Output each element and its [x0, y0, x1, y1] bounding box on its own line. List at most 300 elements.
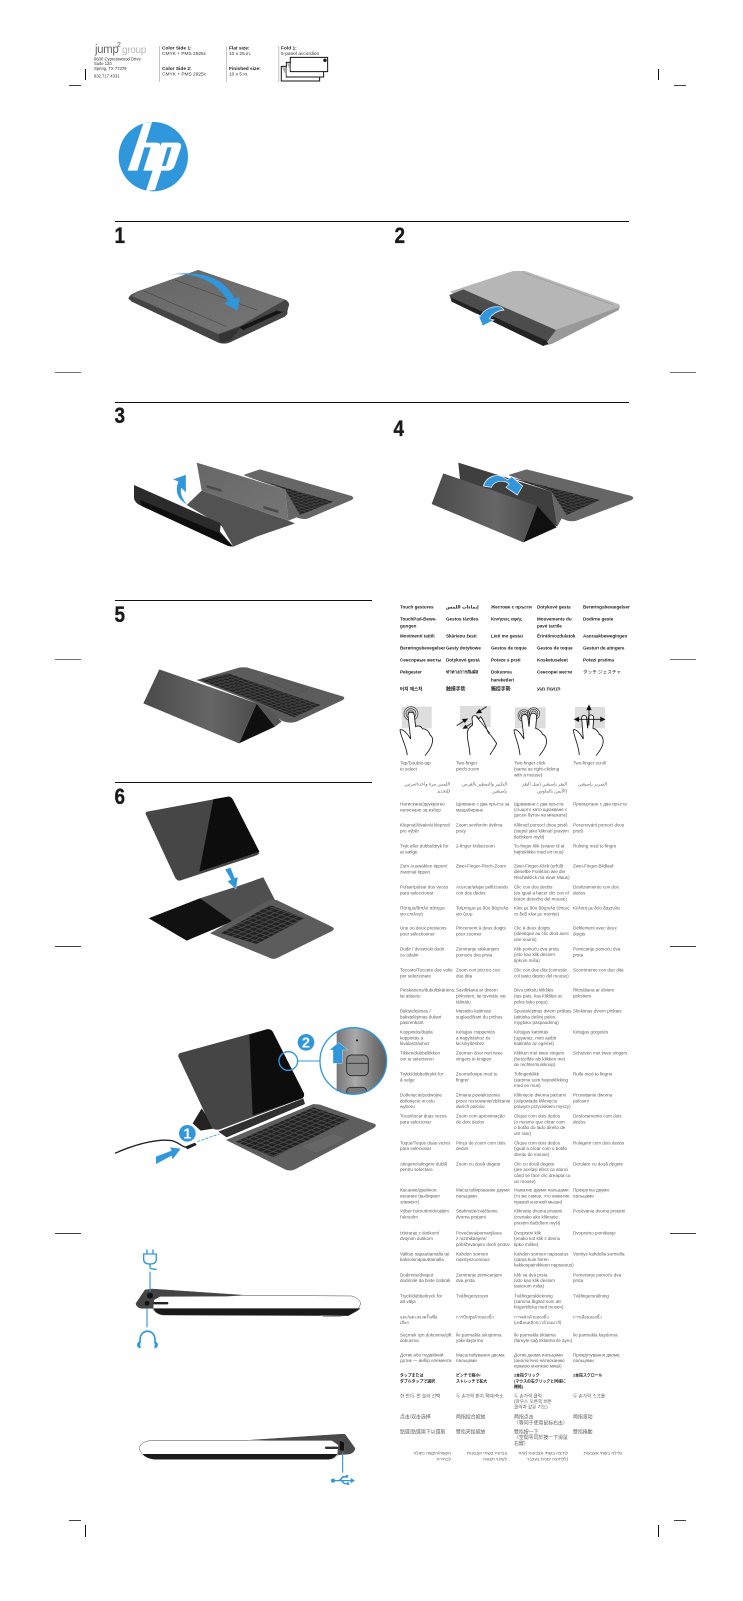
gesture descriptions: Greek: Κύλιση με δύο δάχτυλα — [573, 904, 620, 910]
gesture icons — [400, 705, 605, 756]
gesture descriptions: Danish: Tryk eller dobbelttryk for — [400, 844, 449, 848]
gesture descriptions: Serbian: dva prsta — [456, 1278, 475, 1283]
gesture descriptions: Traditional Chinese — [400, 1428, 593, 1447]
gesture descriptions: Polish: Zmiana powiększenia — [456, 1092, 500, 1098]
gesture descriptions: Finnish: kakkospainikkeen napsautus) — [514, 1262, 574, 1268]
fold spec: 5-panel accordion — [281, 51, 319, 57]
gesture descriptions: English — [400, 760, 606, 778]
fold spec: Fold 1: — [281, 46, 297, 52]
gesture descriptions: Norwegian: Trykk/dobbelttrykk for — [400, 1072, 443, 1076]
gesture descriptions: Japanese: 2本指クリック — [514, 1372, 540, 1378]
titles row 2: TouchPad-Bewe- — [400, 616, 437, 622]
gesture descriptions: Swedish: att välja — [400, 1299, 416, 1304]
gesture descriptions: Korean: 두 손가락 핀치 확대/축소 — [456, 1392, 503, 1400]
gesture descriptions: Latvian: Pieskāriens/dubultskāriens, — [400, 988, 455, 992]
gesture descriptions: Traditional Chinese: 雙指按一下 — [514, 1430, 538, 1436]
gesture descriptions: Slovak: (rovnako ako kliknutie — [514, 1214, 558, 1220]
gesture descriptions: Bulgarian: мащабиране — [456, 808, 484, 812]
gesture descriptions: Simplified Chinese: 两指点击 — [514, 1416, 534, 1420]
titles row 7 — [400, 686, 561, 692]
titles row 6: Dokunma — [491, 670, 512, 674]
gesture descriptions: Danish: højreklikke med en mus) — [514, 850, 564, 854]
gesture descriptions: Lithuanian: mygtuko paspaudimą) — [514, 1020, 559, 1025]
gesture descriptions: Japanese: ピンチで縮小/ — [456, 1372, 480, 1378]
gesture descriptions: Spanish: Pulsar/pulsar dos veces — [400, 884, 448, 890]
gesture descriptions: Russian: Касание/двойное — [400, 1188, 436, 1192]
gesture descriptions: Spanish: Acercar/alejar pellizcando — [456, 884, 508, 890]
gesture descriptions: Swedish: Tvåfingerszoom — [456, 1292, 489, 1298]
gesture descriptions: Japanese: タップまたは — [400, 1372, 423, 1378]
gesture descriptions: Korean: 클릭과 같은 기능) — [514, 1404, 548, 1411]
jump2group logo — [94, 42, 147, 56]
arrow: flip — [478, 307, 504, 326]
titles row 4: Gesturi de atingere — [583, 646, 625, 650]
gesture descriptions: Polish: prawym przyciskiem myszy) — [514, 1104, 571, 1109]
gesture descriptions: Polish — [400, 1092, 613, 1109]
arrow: plug in — [156, 1147, 181, 1164]
gesture descriptions: Lithuanian: suglaudžiant du pirštus — [456, 1014, 503, 1020]
gesture descriptions: Portuguese: Clique com dois dedos — [514, 1140, 560, 1146]
gesture descriptions: Japanese: 2本指スクロール — [573, 1372, 603, 1378]
gesture descriptions: English: (same as right-clicking — [514, 766, 560, 772]
gesture descriptions: Slovene: Povečava/pomanjšava — [456, 1230, 502, 1236]
gesture descriptions: Turkish: Seçmek için dokunma/çift — [400, 1332, 452, 1338]
gesture descriptions: English: to select — [400, 766, 418, 772]
gesture descriptions: Croatian: (isto kao klik desnim — [514, 952, 555, 957]
gesture descriptions: Portuguese (Brazil): Clique com dois dedos — [514, 1114, 560, 1118]
gesture descriptions: Slovak: ťuknutím — [400, 1214, 418, 1220]
gesture descriptions: German: Zum Auswählen tippen/ — [400, 864, 447, 868]
gesture descriptions: Portuguese: Toque/Toque duas vezes — [400, 1140, 450, 1146]
icon: USB — [331, 1475, 355, 1485]
gesture descriptions: Danish: at vælge — [400, 850, 418, 854]
gesture descriptions: Greek: για ζουμ — [456, 912, 473, 916]
gesture descriptions: Slovak: Kliknutie dvoma prstami — [514, 1208, 562, 1214]
gesture descriptions: Danish — [400, 844, 617, 854]
gesture descriptions: Latvian: (tas pats, kas klikšķis ar — [514, 994, 562, 998]
gesture descriptions: Latvian: lai atlasītu — [400, 994, 421, 998]
titles row 5 — [400, 658, 615, 662]
gesture descriptions: Spanish: dedos — [573, 890, 586, 896]
gesture descriptions: Latvian: tālinātu — [456, 1000, 471, 1004]
gesture descriptions: Thai: การเลื่อนสองนิ้ว — [573, 1314, 602, 1320]
HP logo — [119, 122, 188, 191]
gesture descriptions: Slovene: tipko miške) — [514, 1242, 539, 1247]
gesture descriptions: Slovene: dvojnim dotikom — [400, 1236, 433, 1241]
gesture descriptions: Greek — [400, 904, 620, 916]
illustration: step 5 tented keyboard — [143, 667, 344, 743]
gesture descriptions: Norwegian: med en mus) — [514, 1083, 541, 1088]
gesture descriptions: Serbian: Klik sa dva prsta — [514, 1272, 547, 1278]
gesture descriptions: Swedish: Tvåfingersrullning — [573, 1292, 609, 1298]
gesture descriptions: Korean: 두 손가락 클릭 — [514, 1394, 542, 1398]
gesture descriptions: Spanish: Clic con dos dedos — [514, 884, 552, 890]
gesture descriptions: Serbian: (isto kao klik desnim — [514, 1278, 555, 1283]
gesture descriptions: Latvian: pirkstiem, lai tuvinātu vai — [456, 994, 506, 998]
gesture descriptions: Croatian: Zumiranje stiskanjem — [456, 946, 499, 952]
gesture descriptions: Dutch: om te selecteren — [400, 1056, 434, 1062]
gesture descriptions: Portuguese (Brazil): Tocar/tocar duas vezes — [400, 1114, 447, 1118]
titles row 4: Gesty dotykowe — [446, 646, 481, 650]
gesture descriptions: Slovak: pravým tlačidlom myši) — [514, 1220, 561, 1226]
gesture descriptions: Traditional Chinese: （空間等同於按一下滑鼠 — [514, 1434, 568, 1441]
gesture descriptions: French: Défilement avec deux — [573, 926, 617, 930]
illustration: step 2 flip cover — [449, 271, 620, 346]
gesture descriptions: Bulgarian: десен бутон на мишката) — [514, 812, 568, 818]
gesture descriptions: Dutch: vingers te knijpen — [456, 1056, 492, 1062]
printer address: Suite 120 — [94, 61, 112, 66]
gesture descriptions: Portuguese: dedos — [456, 1146, 469, 1151]
gesture descriptions: Portuguese: Rolagem com dois dedos — [573, 1140, 625, 1146]
gesture descriptions: Ukrainian: правою кнопкою миші) — [514, 1364, 562, 1368]
gesture descriptions: Finnish: Vieritys kahdella sormella — [573, 1252, 625, 1256]
gesture descriptions: Czech: pro výběr — [400, 828, 419, 834]
gesture descriptions: Serbian: Dodirnite/dvaput — [400, 1272, 433, 1278]
gesture descriptions: Serbian: Zumiranje primicanjem — [456, 1272, 502, 1278]
gesture descriptions: English: Tap/Double-tap — [400, 760, 431, 766]
gesture descriptions: Polish: Dotknięcie/podwójne — [400, 1092, 442, 1098]
gesture descriptions: Dutch: Tikken/dubbeltikken — [400, 1050, 440, 1056]
titles row 1 — [400, 604, 630, 610]
gesture descriptions: French: pour sélectionner — [400, 932, 435, 936]
gesture descriptions: Arabic: التمرير بإصبعين — [578, 782, 607, 788]
gesture descriptions: Turkish: İki parmakla kaydırma — [573, 1332, 618, 1338]
gesture descriptions: French: Une ou deux pressions — [400, 926, 447, 930]
arrow: insert tablet — [225, 868, 238, 889]
gesture descriptions: Croatian: Dodir / dvostruki dodir — [400, 946, 444, 952]
titles row 7: תנועות מגע — [537, 686, 561, 692]
gesture descriptions: Hebrew: לבחירה — [437, 1456, 452, 1462]
gesture descriptions: Spanish: con dos dedos — [456, 890, 486, 896]
gesture descriptions: Hebrew — [413, 1450, 622, 1462]
gesture descriptions: Croatian: prsta — [573, 952, 584, 958]
gesture descriptions: Portuguese (Brazil): Zoom com aproximação — [456, 1114, 505, 1118]
gesture descriptions: Hebrew: ללחיצה ימנית בעכבר) — [527, 1456, 568, 1462]
gesture descriptions: Finnish — [400, 1252, 625, 1268]
gesture descriptions: Czech: prstů — [573, 828, 584, 834]
gesture descriptions: Bulgarian: (същото като щракване с — [514, 807, 568, 812]
gesture descriptions: Polish: przez rozsuwanie/zbliżanie — [456, 1098, 511, 1104]
gesture descriptions: Czech: Posunování pomocí dvou — [573, 822, 624, 828]
gesture descriptions: Lithuanian: Slinkimas dviem pirštais — [573, 1008, 622, 1014]
jump2group logo: 2 — [117, 42, 121, 49]
titles row 7: 触摸手势 — [446, 686, 466, 692]
color specs — [162, 46, 207, 78]
gesture descriptions: Hungarian: Kétujjas csippentés — [456, 1030, 495, 1034]
gesture descriptions: Ukrainian: пальцями — [456, 1358, 477, 1363]
gesture descriptions: English: with a mouse) — [514, 772, 543, 778]
callout badge 2 — [298, 1034, 314, 1052]
icon: fold diagram — [281, 57, 328, 81]
gesture descriptions: Italian: Zoom con pizzico con — [456, 968, 500, 972]
gesture descriptions: Dutch: de rechtermuisknop) — [514, 1062, 556, 1067]
callout badge 1: 1 — [183, 1127, 191, 1143]
gesture descriptions: Norwegian: Tofingerklikk — [514, 1072, 539, 1076]
gesture descriptions: Simplified Chinese: 点击/双击选择 — [400, 1414, 431, 1420]
gesture descriptions: Latvian: Divu pirkstu klikšķis — [514, 988, 553, 992]
gesture descriptions: Norwegian: Rulle med to fingrer — [573, 1072, 613, 1076]
gesture descriptions: Ukrainian: Дотик або подвійний — [400, 1352, 443, 1358]
size specs — [229, 46, 261, 78]
gesture descriptions: French: une souris) — [514, 937, 537, 942]
gesture descriptions: German: Zwei-Finger-Klick (erfüllt — [514, 864, 563, 868]
gesture descriptions: German: Rechtsklick mit einer Maus) — [514, 875, 570, 880]
gesture descriptions: Japanese — [400, 1372, 603, 1389]
gesture descriptions: Serbian: prsta — [573, 1278, 584, 1283]
titles row 1: إيماءات اللمس — [446, 606, 479, 610]
gesture descriptions: Hungarian: Koppintás/dupla — [400, 1030, 433, 1034]
gesture descriptions: Hebrew: לחיצה בשתי אצבעות (זהה — [518, 1450, 568, 1456]
gesture descriptions: Turkish: (fareyle sağ tıklatma ile aynı) — [514, 1338, 573, 1343]
illustration: step 7 charging and power — [115, 1027, 390, 1170]
gesture descriptions: Hungarian: kicsinyítéshez — [456, 1041, 485, 1046]
titles row 6: ท่าทางการสัมผัส — [446, 668, 479, 676]
titles row 1: Жестове с пръсти — [490, 604, 532, 610]
gesture descriptions: Croatian: tipkom miša) — [514, 958, 540, 963]
gesture descriptions: Italian: Clic con due dita (coincide — [514, 968, 567, 972]
gesture descriptions: Dutch: Klikken met twee vingers — [514, 1050, 564, 1056]
gesture descriptions: Russian: элемент) — [400, 1200, 420, 1204]
gesture descriptions: Russian: касание (выбирает — [400, 1194, 440, 1198]
illustration: step 1 folded cover — [128, 270, 289, 344]
titles row 2: gungen — [400, 624, 417, 628]
titles row 7: 觸控手勢 — [491, 686, 511, 692]
gesture descriptions: Lithuanian: Mastelio keitimas — [456, 1008, 491, 1014]
gesture descriptions: Serbian: Pomeranje pomoću dva — [573, 1272, 621, 1278]
gesture descriptions: Lithuanian: bakstelėjimas dukart — [400, 1014, 442, 1020]
gesture descriptions: Czech: Klepnutí/dvakrát klepnutí — [400, 822, 450, 828]
gesture descriptions: Norwegian: fingrer — [456, 1078, 469, 1082]
gesture descriptions: Spanish: para seleccionar — [400, 890, 434, 896]
gesture descriptions: Ukrainian: Дотик двома пальцями — [514, 1352, 563, 1358]
titles row 6: Сенсорні жести — [537, 670, 572, 674]
arrow: fold forward — [483, 476, 523, 495]
gesture descriptions: Latvian: pirkstiem — [573, 994, 591, 998]
gesture descriptions: German: Zwei-Finger-Bildlauf — [573, 864, 614, 868]
fold spec — [281, 46, 319, 57]
titles row 5: Kosketuseleet — [537, 658, 568, 662]
gesture descriptions: Slovene: Dvoprstno pomikanje — [573, 1230, 616, 1236]
gesture descriptions: Italian — [400, 968, 624, 978]
gesture descriptions: German: dieselbe Funktion wie der — [514, 869, 566, 874]
gesture descriptions: Polish: Przewijanie dwoma — [573, 1092, 612, 1098]
titles row 2: pavé tactile — [537, 624, 562, 628]
gesture descriptions: Slovak — [400, 1208, 625, 1226]
gesture descriptions: Lithuanian: Spustelėjimas dviem pirštais — [514, 1008, 571, 1014]
gesture descriptions: Thai: (เหมือนคลิกขวาด้วยเมาส์) — [514, 1320, 562, 1325]
illustration: side view with USB — [139, 1434, 355, 1485]
illustration: step 3 open cover — [134, 463, 353, 547]
gesture descriptions: Danish: Rulning med to fingre — [573, 844, 617, 848]
gesture descriptions: Dutch: (hetzelfde als klikken met — [514, 1056, 566, 1062]
gesture descriptions: Portuguese: (igual a clicar com o botão — [514, 1146, 568, 1151]
titles row 3: Érintőmozdulatok — [537, 632, 576, 638]
gesture descriptions: Swedish: (samma åtgärd som att — [514, 1298, 561, 1304]
illustration: step 4 tent cover — [432, 463, 633, 542]
gesture descriptions: Turkish: dokunma — [400, 1338, 419, 1343]
gesture descriptions: Slovak: Stiahnutie/zväčšenie — [456, 1208, 498, 1214]
titles row 5: Poteze s prsti — [491, 658, 521, 662]
gesture descriptions: Dutch: Schuiven met twee vingers — [573, 1050, 628, 1056]
section rules — [115, 221, 629, 783]
gesture descriptions: Hungarian: kattintás az egérrel) — [514, 1041, 554, 1046]
header: printer slug — [94, 42, 328, 82]
gesture descriptions: Hebrew: לשינוי תצוגה — [483, 1456, 508, 1462]
gesture descriptions: Bulgarian: Превъртане с два пръста — [573, 802, 627, 806]
gesture descriptions: Italian: Scorrimento con due dita — [573, 968, 624, 972]
titles row 2: Dodirne geste — [583, 616, 614, 622]
gesture descriptions: Japanese: (マウスの右クリックと同様に — [514, 1378, 566, 1383]
step numbers: 4 — [394, 417, 405, 441]
gesture descriptions: Arabic: اللمس مرة واحدة/مرتين — [404, 782, 450, 786]
gesture descriptions: Portuguese (Brazil) — [400, 1114, 622, 1136]
gesture descriptions: Portuguese (Brazil): dedos — [573, 1120, 586, 1124]
printer address: 832.717.4331 — [94, 74, 120, 78]
gesture descriptions: Finnish: Kahden sormen napsautus — [514, 1252, 568, 1256]
gesture descriptions: Thai — [400, 1314, 602, 1325]
gesture descriptions: English: Two-finger click — [514, 760, 545, 766]
gesture descriptions: Thai: เลือก — [400, 1320, 410, 1325]
gesture descriptions: Czech: prsty — [456, 828, 467, 834]
gesture descriptions: Polish: dwóch palców — [456, 1104, 485, 1109]
gesture descriptions: Ukrainian: Масштабування двома — [456, 1352, 504, 1358]
gesture descriptions: Bulgarian: натискане за избор — [400, 808, 441, 812]
icon: headphones — [137, 1331, 158, 1348]
gesture descriptions: Portuguese (Brazil): o botão do lado direito de — [514, 1125, 566, 1130]
gesture descriptions: Simplified Chinese: 两指捏合缩放 — [456, 1414, 485, 1420]
gesture descriptions: Portuguese: direito do mouse) — [514, 1152, 550, 1157]
gesture descriptions: Arabic: للتحديد — [437, 788, 450, 794]
gesture descriptions: Spanish: botón derecho del mouse) — [514, 896, 567, 902]
gesture descriptions: Romanian: pentru selectare — [400, 1167, 433, 1172]
gesture descriptions: Portuguese: para selecionar — [400, 1146, 432, 1151]
color specs: Color Side 2: — [162, 66, 192, 72]
gesture descriptions: Swedish — [400, 1292, 609, 1310]
gesture descriptions: Hebrew: צביטה בשתי אצבעות — [467, 1450, 507, 1456]
gesture descriptions: Hebrew: גלילה בשתי אצבעות — [584, 1450, 622, 1456]
crop marks — [55, 69, 696, 1537]
printer address: Spring, TX 77379 — [94, 66, 127, 71]
gesture descriptions: Turkish: İki parmakla tıklatma — [514, 1332, 556, 1338]
titles row 7: 터치 제스처 — [400, 686, 422, 692]
titles row 6: タッチ ジェスチャ — [583, 668, 621, 676]
gesture descriptions: Greek: Κλικ με δύο δάχτυλα (όπως — [514, 906, 569, 910]
gesture descriptions: Spanish: (es igual a hacer clic con el — [514, 890, 569, 896]
gesture descriptions: Greek: Πάτημα/διπλό πάτημα — [400, 906, 445, 910]
gesture titles table — [400, 604, 630, 692]
titles row 3 — [400, 632, 627, 638]
gesture descriptions: Czech: Kliknutí pomocí dvou prstů — [514, 822, 568, 828]
gesture descriptions: Korean: 한 번/두 번 눌러 선택 — [400, 1392, 440, 1400]
gesture descriptions: Portuguese (Brazil): de dois dedos — [456, 1120, 485, 1124]
gesture descriptions: Portuguese (Brazil): um rato) — [514, 1131, 531, 1136]
gesture descriptions: German: Zwei-Finger-Pinch-Zoom — [456, 864, 506, 868]
gesture descriptions: Romanian: Atingere/atingere dublă — [400, 1162, 447, 1166]
color specs: CMYK + PMS 2925c — [162, 51, 207, 57]
callout badge 1 — [179, 1125, 196, 1143]
titles row 2 — [400, 616, 614, 628]
size specs: Flat size: — [229, 46, 250, 52]
gesture descriptions: Lithuanian: pasirenkant — [400, 1020, 424, 1025]
gesture descriptions: Danish: To-finger klik (svarer til at — [514, 844, 565, 848]
gesture descriptions: Portuguese (Brazil): Deslocamento com dois — [573, 1114, 622, 1118]
gesture descriptions: Latvian: peles labo pogu) — [514, 1000, 548, 1004]
gesture descriptions: English: Two-finger — [456, 760, 477, 766]
size specs: 10 x 5 in. — [229, 72, 248, 78]
illustration: side view with ports — [136, 1249, 361, 1348]
titles row 4: Berøringsbevegelser — [400, 646, 445, 650]
gesture descriptions: Slovene: (enako kot klik z desno — [514, 1236, 561, 1241]
gesture descriptions: Finnish: Kahden sormen — [456, 1252, 488, 1256]
gesture descriptions: Spanish: Deslizamiento con dos — [573, 884, 619, 890]
stand and hinge — [149, 898, 240, 941]
gesture descriptions: Ukrainian: дотик — вибір елемента — [400, 1358, 452, 1363]
gesture descriptions: Polish: Kliknięcie dwoma palcami — [514, 1092, 566, 1098]
gesture descriptions: Bulgarian: Щракване с два пръста — [514, 802, 564, 806]
gesture descriptions: French: doigts — [573, 932, 586, 936]
gesture descriptions: Polish: dotknięcie w celu — [400, 1098, 435, 1104]
gesture descriptions: Hungarian: (ugyanaz, mint ajobb — [514, 1036, 557, 1040]
gesture descriptions: Thai: การคลิกด้วยสองนิ้ว — [514, 1314, 549, 1320]
gesture descriptions: English: Two-finger scroll — [573, 760, 606, 766]
keyboard — [210, 900, 334, 959]
gesture descriptions: Russian: Нажатие двумя пальцами — [514, 1188, 569, 1192]
titles row 2: Κινήσεις αφής — [491, 616, 523, 622]
gesture descriptions: Traditional Chinese: 點選/點選兩下以選取 — [400, 1428, 445, 1436]
gesture descriptions: German: zweimal tippen — [400, 870, 431, 874]
gesture descriptions: Swedish: Tvåfingersklickning — [514, 1294, 553, 1298]
gesture descriptions: Dutch: Zoomen door met twee — [456, 1050, 503, 1056]
gesture descriptions: Polish: palcami — [573, 1098, 589, 1104]
gesture descriptions: Romanian: Zoom cu două degete — [456, 1162, 501, 1166]
gesture descriptions: English: pinch zoom — [456, 766, 479, 772]
gesture descriptions: Russian: пальцами — [573, 1194, 594, 1198]
gesture descriptions: Lithuanian: (atitinka dešinį pelės — [514, 1014, 556, 1020]
gesture descriptions: Russian: правой кнопкой мыши) — [514, 1198, 563, 1204]
gesture descriptions: Japanese: 機能) — [514, 1384, 524, 1389]
titles row 5: Potezi prstima — [583, 658, 615, 662]
gesture descriptions: Croatian — [400, 946, 621, 963]
titles row 4: Gestos de toque — [537, 646, 573, 650]
gesture descriptions: Latvian: Ritināšana ar diviem — [573, 988, 614, 992]
gesture descriptions: Traditional Chinese: 雙指捲動 — [573, 1428, 593, 1436]
gesture descriptions: Simplified Chinese: （等同于使用鼠标右击） — [514, 1420, 568, 1426]
icon: two-finger click — [514, 707, 546, 756]
power cable — [115, 1140, 186, 1153]
gesture descriptions: Arabic: النقر بإصبعين (مثل النقر — [522, 782, 567, 786]
gesture descriptions: Simplified Chinese — [400, 1414, 593, 1426]
gesture descriptions: Bulgarian: Щипване с два пръста за — [456, 802, 509, 806]
gesture descriptions: French: Clic à deux doigts — [514, 926, 550, 930]
gesture descriptions: Romanian — [400, 1162, 624, 1184]
gesture descriptions: Czech: Zoom sevřením dvěma — [456, 822, 502, 828]
jump2group logo: jump — [94, 44, 118, 56]
callout badge 2: 2 — [302, 1036, 310, 1052]
gesture descriptions: Turkish: yakınlaştırma — [456, 1338, 484, 1343]
step numbers: 6 — [114, 785, 125, 809]
printer address: 6600 Cypresswood Drive — [94, 56, 141, 62]
gesture descriptions: Slovene — [400, 1230, 616, 1247]
gesture descriptions: Hungarian: Kétujjas görgetés — [573, 1030, 609, 1034]
illustration: step 6 attach tablet — [146, 797, 334, 959]
gesture descriptions: Italian: Toccare/Toccare due volte — [400, 968, 453, 972]
gesture descriptions: Slovak: dvoma prstami — [456, 1214, 486, 1220]
gesture descriptions: Italian: per selezionare — [400, 974, 432, 978]
gesture descriptions: Turkish — [400, 1332, 618, 1343]
gesture descriptions: Norwegian: Zoome/knipe med to — [456, 1072, 497, 1076]
titles row 6: Pekgester — [400, 670, 422, 674]
color specs: Color Side 1: — [162, 46, 192, 52]
